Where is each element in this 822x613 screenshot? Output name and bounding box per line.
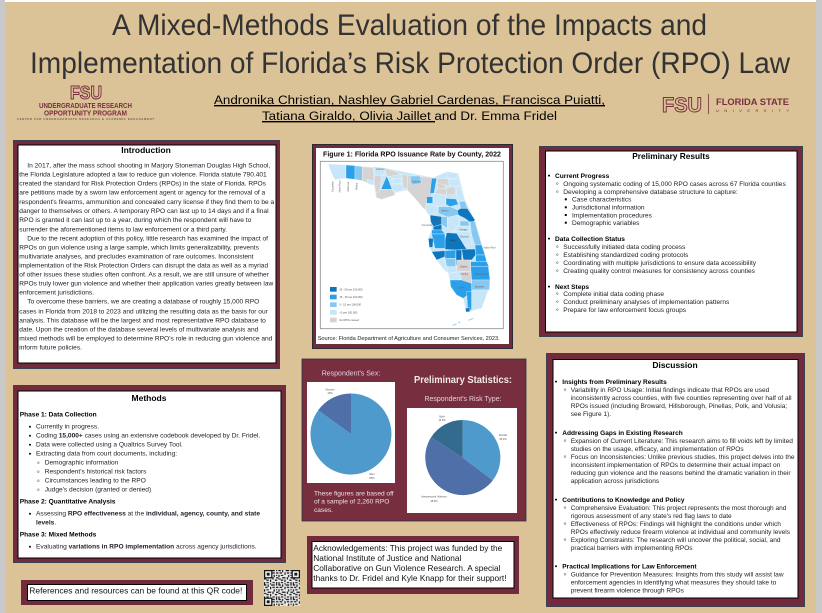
chart: respondent's sex pie: Respondent's Sex:: [322, 370, 380, 378]
text block: discussion points: Comprehensive Evaluation: This project represents the most thorough and: [571, 505, 787, 512]
authors: [214, 93, 605, 123]
chart: respondent's risk type pie: Interpersonal Violence: [421, 494, 447, 498]
text block: current progress, data collection, next steps: Data Collection Status: [555, 236, 625, 243]
legend: issuance rate: 15 - 25 per 100,000: [339, 295, 363, 299]
text block: discussion points: studies on the usage, efficacy, and implementation of RPOs: [571, 446, 744, 453]
text block: discussion points: Contributions to Knowledge and Policy: [562, 497, 685, 504]
text block: discussion points: reducing gun violence and the reasons behind the dramatic variation in their: [571, 470, 791, 477]
authors: Tatiana Giraldo, Olivia Jaillet and Dr. Emma Fridel: [262, 109, 557, 123]
text block: introduction: date. Upon the creation of the database several levels of multivariate analysis and: [19, 327, 259, 334]
text block: discussion points: prevent firearm violence through RPOs: [571, 588, 685, 595]
text block: discussion points: enforcement agencies in identifying what measures they should take to: [571, 580, 777, 587]
callout: references: [21, 580, 253, 605]
text block: discussion points: inconsistent implementation of RPOs to determine their actual impact on: [571, 462, 781, 469]
callout: acknowledgements: Collaborative on Gun Violence Research. A special: [313, 563, 501, 573]
text block: introduction: Due to the recent adoption of this policy, little research has examined the impact of: [27, 235, 268, 242]
title: Implementation of Florida’s Risk Protection Order (RPO) Law: [30, 47, 790, 80]
chart: choropleth map of Florida counties: Orange: [459, 229, 468, 232]
text block: current progress, data collection, next steps: Implementation procedures: [572, 212, 653, 219]
text block: introduction: respondent's firearms, ammunition and concealed carry license if they find them to be a: [19, 199, 275, 206]
text block: discussion points: Expansion of Current Literature: This research aims to fill voids left by limited: [571, 438, 793, 445]
text block: current progress, data collection, next steps: Developing a comprehensive database structure to capture:: [563, 189, 738, 196]
text block: current progress, data collection, next steps: Establishing standardized coding protocols: [563, 252, 689, 259]
legend: issuance rate: <5 per 100,000: [339, 310, 358, 314]
text block: introduction: cases in Florida from 2018 to 2023 and utilizing the resulting data as the basis for our: [19, 308, 269, 315]
chart: choropleth map of Florida counties: Polk: [450, 239, 456, 243]
text block: discussion points: [555, 379, 795, 595]
text block: methods phases: Coding 15,000+ cases using an extensive codebook developed by Dr. Fridel.: [36, 433, 260, 440]
text block: methods phases: Extracting data from court documents, including:: [36, 451, 177, 458]
title: A Mixed-Methods Evaluation of the Impacts and: [112, 9, 707, 42]
callout: acknowledgements: Acknowledgements: This project was funded by the: [313, 543, 503, 553]
chart: choropleth map of Florida counties: Walton: [355, 182, 358, 190]
chart: respondent's risk type pie: 15.8%: [438, 418, 446, 422]
text block: methods phases: Respondent's historical risk factors: [45, 469, 147, 476]
text block: current progress, data collection, next steps: Complete initial data coding phase: [563, 291, 664, 298]
chart: choropleth map of Florida counties: Madison: [412, 181, 421, 183]
heading: preliminary results: Preliminary Results: [632, 151, 710, 161]
chart: choropleth map of Florida counties: Indian River: [483, 246, 496, 249]
chart: choropleth map of Florida counties: Escambia: [332, 181, 334, 192]
text block: discussion points: RPOs effectively reduce firearm violence at individual and community levels: [571, 529, 791, 536]
text block: current progress, data collection, next steps: Ongoing systematic coding of 15,000 RPO cases across 67 Florida counties: [563, 181, 786, 188]
text block: introduction: of other issues these studies often confront. As a result, we are still unsure of whether: [19, 272, 270, 279]
callout: references: References and resources can be found at this QR code!: [29, 585, 242, 595]
panel: discussion: [546, 354, 804, 606]
text block: methods phases: Phase 2: Quantitative Analysis: [20, 499, 116, 506]
logo: Florida State University: UNIVERSITY: [716, 108, 789, 113]
chart: choropleth map of Florida counties: Osceola: [460, 236, 469, 238]
panel: introduction: [14, 140, 280, 368]
heading: introduction: Introduction: [121, 145, 171, 155]
text block: introduction: multivariate analyses, and precludes examination of rare outcomes. Inconsistent: [19, 253, 254, 260]
text block: current progress, data collection, next steps: [548, 173, 786, 314]
text block: current progress, data collection, next steps: Creating quality control measures for consistency across counties: [563, 268, 756, 275]
chart: respondent's risk type pie: 48.9%: [430, 499, 438, 503]
chart: choropleth map of Florida counties: Hernando: [422, 224, 433, 227]
chart: respondent's risk type pie: Respondent's Risk Type:: [424, 396, 502, 403]
chart: choropleth map of Florida counties: Citrus: [435, 220, 442, 223]
chart: respondent's risk type pie: Both: [439, 414, 445, 418]
chart: choropleth map of Florida counties: Santa Rosa: [339, 180, 342, 193]
text block: methods phases: Demographic information: [45, 460, 119, 467]
chart: choropleth map of Florida counties: [320, 161, 503, 329]
text block: discussion points: application across jurisdictions: [571, 478, 660, 485]
callout: acknowledgements: thanks to Dr. Fridel and Kyle Knapp for their support!: [313, 573, 507, 583]
chart: choropleth map of Florida counties: Glades: [460, 267, 468, 269]
chart: respondent's risk type pie: [407, 396, 517, 513]
text block: methods phases: Currently in progress.: [36, 424, 99, 431]
heading: figure 1: Figure 1: Florida RPO Issuance Rate by County, 2022: [323, 152, 501, 159]
text block: sample note: cases.: [314, 507, 333, 514]
chart: respondent's risk type pie: 35.3%: [499, 437, 507, 441]
text block: introduction: RPOs on gun violence using a large sample, which limits generalizability, prevents: [19, 244, 260, 251]
text block: introduction: RPO is granted it can last up to a year, during which the respondent will have to: [19, 217, 252, 224]
text block: methods phases: levels.: [36, 520, 56, 527]
text block: current progress, data collection, next steps: Conduct preliminary analyses of implementation patterns: [563, 299, 730, 306]
text block: current progress, data collection, next steps: Coordinating with multiple jurisdictions to ensure data accessibility: [563, 260, 757, 267]
text block: methods phases: Phase 1: Data Collection: [20, 412, 97, 419]
logo: FSU undergraduate research opportunity program: OPPORTUNITY PROGRAM: [44, 108, 127, 118]
text block: introduction: created the standard for Risk Protection Orders (RPOs) in the state of Florida. RPOs: [19, 180, 267, 188]
legend: issuance rate: 5 - 15 per 100,000: [339, 303, 362, 307]
text block: methods phases: Evaluating variations in RPO implementation across agency jurisdictions.: [36, 544, 257, 551]
chart: respondent's sex pie: [307, 370, 395, 483]
text block: introduction: are petitions made by a sworn law enforcement agent or agency for the removal of a: [19, 190, 266, 196]
text block: introduction: surrender the aforementioned items to law enforcement or a third party.: [19, 226, 227, 233]
text block: introduction: analysis. This database will be the largest and most representative RPO database to: [19, 317, 266, 324]
text block: discussion points: Practical Implications for Law Enforcement: [562, 564, 697, 571]
text block: methods phases: [20, 412, 260, 551]
chart: respondent's sex pie: 85%: [369, 476, 375, 480]
chart: choropleth map of Florida counties: Jackson: [376, 169, 385, 171]
chart: respondent's sex pie: Women: [326, 388, 335, 392]
logo: FSU undergraduate research opportunity program: CENTER FOR UNDERGRADUATE RESEARCH & ACADEMIC ENGAGEMENT: [17, 117, 154, 121]
text block: discussion points: Insights from Preliminary Results: [562, 379, 667, 386]
chart: choropleth map of Florida counties: Marion: [441, 210, 449, 213]
text block: introduction: danger to themselves or others. A temporary RPO can last up to 14 days and if a final: [19, 208, 269, 215]
panel: figure 1 map: [312, 144, 512, 348]
source note: Source: Florida Department of Agriculture and Consumer Services, 2023.: [318, 336, 500, 342]
logo: FSU undergraduate research opportunity program: [17, 83, 154, 121]
text block: sample note: of a sample of 2,260 RPO: [314, 498, 389, 506]
logo: Florida State University: FLORIDA STATE: [716, 97, 789, 108]
heading: discussion: Discussion: [652, 360, 698, 370]
text block: discussion points: rigorous assessment of any state's red flag laws to date: [571, 513, 732, 520]
logo: Florida State University: [662, 94, 789, 117]
text block: sample note: These figures are based off: [314, 490, 394, 498]
text block: methods phases: Phase 3: Mixed Methods: [20, 532, 97, 539]
callout: acknowledgements: National Institute of Justice and National: [313, 553, 462, 563]
chart: choropleth map of Florida counties: Okaloosa: [348, 181, 350, 192]
text block: current progress, data collection, next steps: Successfully initiated data coding process: [563, 244, 686, 251]
text block: current progress, data collection, next steps: Case characteristics: [572, 197, 632, 204]
text block: introduction: In 2017, after the mass school shooting in Marjory Stoneman Douglas High School,: [27, 163, 270, 170]
text block: introduction: inform future policies.: [19, 345, 82, 352]
text block: discussion points: Effectiveness of RPOs: Findings will highlight the conditions under which: [571, 521, 781, 528]
legend: issuance rate: 25 - 65 per 100,000: [339, 287, 363, 291]
text block: discussion points: RPOs issued (including Broward, Hillsborough, Pinellas, Polk, and Volusia;: [571, 403, 787, 410]
text block: methods phases: Data were collected using a Qualtrics Survey Tool.: [36, 442, 183, 449]
text block: current progress, data collection, next steps: Current Progress: [555, 173, 610, 180]
text block: methods phases: Assessing RPO effectiveness at the individual, agency, county, and state: [36, 511, 260, 518]
logo: Florida State University: FSU: [662, 94, 702, 117]
QR code: [264, 570, 300, 606]
chart: choropleth map of Florida counties: Palm Beach: [475, 274, 488, 276]
panel: methods: [14, 386, 286, 562]
legend: issuance rate: [330, 287, 363, 322]
text block: introduction: RPOs truly lower gun violence and whether their application varies greatly between law: [19, 281, 274, 288]
chart: respondent's risk type pie: Suicide: [499, 433, 508, 437]
text block: current progress, data collection, next steps: Demographic variables: [572, 220, 640, 227]
logo: FSU undergraduate research opportunity program: FSU: [70, 83, 102, 103]
panel: preliminary results: [540, 146, 802, 336]
chart: respondent's sex pie: 15%: [327, 391, 333, 395]
text block: sample note: [314, 490, 394, 514]
legend: issuance rate: No RPOs issued: [339, 318, 359, 322]
text block: current progress, data collection, next steps: Jurisdictional information: [572, 205, 645, 212]
text block: methods phases: Judge's decision (granted or denied): [45, 487, 151, 494]
chart: choropleth map of Florida counties: Collier: [458, 286, 465, 289]
text block: discussion points: Focus on Inconsistencies: Unlike previous studies, this project delves into the: [571, 454, 795, 461]
callout: acknowledgements: [307, 536, 519, 594]
chart: respondent's sex pie: Men: [369, 472, 375, 476]
text block: discussion points: Guidance for Prevention Measures: Insights from this study will assist law: [571, 572, 784, 579]
text block: introduction: enforcement jurisdictions.: [19, 290, 94, 297]
text block: methods phases: Circumstances leading to the RPO: [45, 478, 146, 485]
heading: preliminary statistics: Preliminary Statistics:: [414, 375, 512, 386]
text block: introduction: mixed methods will be employed to determine RPO's role in reducing gun violence and: [19, 336, 273, 343]
text block: current progress, data collection, next steps: Prepare for law enforcement focus groups: [563, 307, 687, 314]
text block: discussion points: Variability in RPO Usage: Initial findings indicate that RPOs are used: [571, 387, 770, 394]
text block: discussion points: Addressing Gaps in Existing Research: [562, 430, 683, 437]
text block: discussion points: inconsistently across counties, with five counties representing over half of all: [571, 395, 792, 402]
text block: discussion points: practical barriers with implementing RPOs: [571, 545, 693, 552]
heading: methods: Methods: [132, 393, 167, 403]
text block: current progress, data collection, next steps: Next Steps: [555, 284, 589, 291]
text block: introduction: [19, 163, 275, 352]
chart: choropleth map of Florida counties: Hendry: [461, 273, 469, 276]
text block: introduction: To overcome these barriers, we are creating a database of roughly 15,000 RPO: [27, 299, 259, 306]
authors: Andronika Christian, Nashley Gabriel Cardenas, Francisca Puiatti,: [214, 93, 605, 107]
panel: preliminary statistics: [302, 359, 526, 521]
logo: FSU undergraduate research opportunity program: UNDERGRADUATE RESEARCH: [39, 101, 132, 110]
text block: introduction: implementation of the Risk Protection Orders can disrupt the data as well as a myriad: [19, 263, 268, 270]
text block: introduction: the Florida Legislature adopted a law to reduce gun violence. Florida statute 790.401: [19, 172, 267, 179]
title: [30, 9, 790, 80]
text block: discussion points: Exploring Constraints: The research will uncover the political, social, and: [571, 537, 781, 544]
chart: choropleth map of Florida counties: Broward: [475, 285, 484, 288]
text block: discussion points: see Figure 1).: [571, 411, 611, 418]
